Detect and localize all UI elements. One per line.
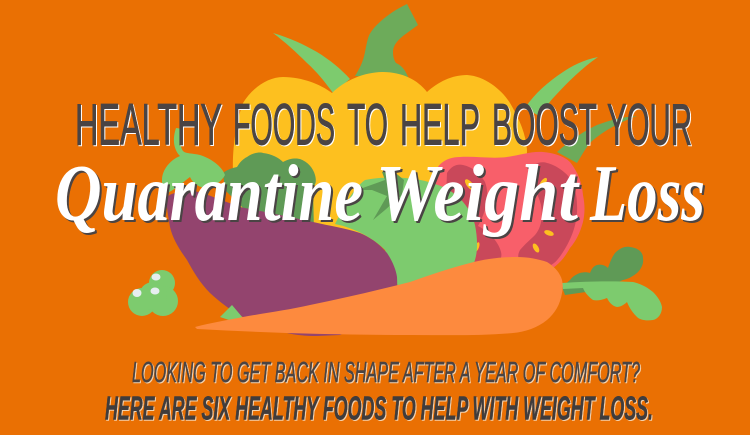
title: quarantine weight loss: Weight	[376, 150, 580, 238]
title: quarantine weight loss	[55, 150, 705, 238]
icon: eggplant	[167, 191, 397, 336]
icon: broccoli	[223, 152, 316, 232]
heading: healthy foods line: HELP	[400, 92, 480, 158]
title: quarantine weight loss: Quarantine	[55, 150, 363, 238]
heading: healthy foods line: BOOST	[492, 92, 597, 158]
heading: healthy foods line: HEALTHY	[75, 92, 222, 158]
icon: tomato	[433, 152, 584, 290]
icon: yellow pepper	[233, 72, 527, 240]
icon: green vegetable	[335, 177, 477, 292]
heading: healthy foods line	[75, 92, 692, 158]
icon: lower leaf	[220, 305, 243, 321]
heading: healthy foods line: TO	[347, 92, 388, 158]
illustration: vegetable pile	[128, 4, 662, 336]
icon: vegetable leaf detail	[357, 170, 404, 220]
icon: right pepper leaf	[525, 57, 598, 117]
icon: eggplant cap	[162, 128, 225, 193]
icon: pepper stem	[355, 4, 418, 79]
icon: carrot greens	[562, 247, 662, 320]
icon: left pepper leaf	[273, 33, 350, 93]
icon: peas	[128, 270, 178, 316]
icon: carrot	[195, 257, 563, 335]
icon: dark leaf	[557, 116, 637, 163]
heading: healthy foods line: FOODS	[233, 92, 335, 158]
title: quarantine weight loss: Loss	[589, 150, 705, 238]
